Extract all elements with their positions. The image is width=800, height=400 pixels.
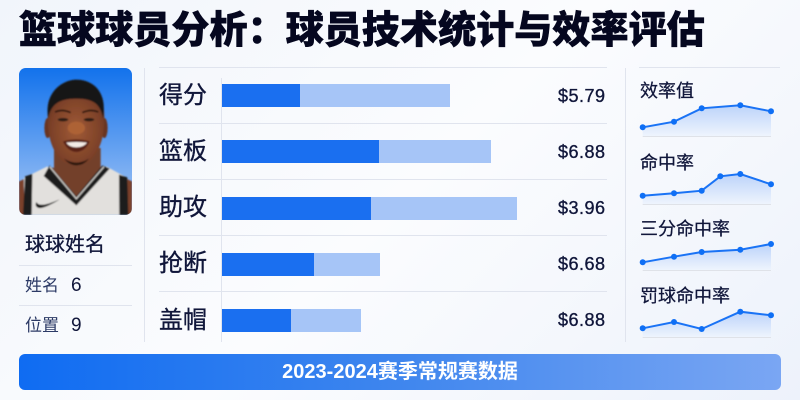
player name: 球球姓名 [25,234,105,256]
row label: 抢断: 抢断 [159,250,207,277]
bar: 盖帽 [222,309,361,332]
bar: 抢断 [222,253,380,276]
row label: 助攻: 助攻 [159,194,207,221]
bar: 助攻 [222,197,517,220]
player portrait [19,68,132,215]
value: 助攻: $3.96 [558,198,606,218]
sparkline: 命中率: 命中率 [640,153,694,173]
sparkline: 罚球命中率 [640,286,774,338]
stat: 位置: 位置 9 [25,315,82,336]
value: 盖帽: $6.88 [558,310,606,330]
bar: 得分 [222,84,450,107]
sparkline: 罚球命中率: 罚球命中率 [640,286,730,306]
footer banner [19,354,781,390]
row label: 篮板: 篮板 [159,138,207,165]
panel: player profile [19,68,132,336]
sparkline: 效率值: 效率值 [640,81,694,101]
bar: 篮板 [222,140,491,163]
title: 篮球球员分析：球员技术统计与效率评估 [19,10,705,52]
sparkline: 三分命中率: 三分命中率 [640,219,730,239]
stat: 姓名: 姓名 6 [25,275,82,296]
sparkline: 三分命中率 [640,219,774,270]
panel: shooting sparklines [640,81,774,338]
row label: 盖帽: 盖帽 [159,307,207,334]
row label: 得分: 得分 [159,82,207,109]
sparkline: 效率值 [640,81,774,136]
footer banner: 2023-2024赛季常规赛数据 [282,361,518,383]
value: 篮板: $6.88 [558,142,606,162]
sparkline: 命中率 [640,153,774,204]
value: 得分: $5.79 [558,86,606,106]
value: 抢断: $6.68 [558,254,606,274]
panel: bar chart [159,82,606,334]
